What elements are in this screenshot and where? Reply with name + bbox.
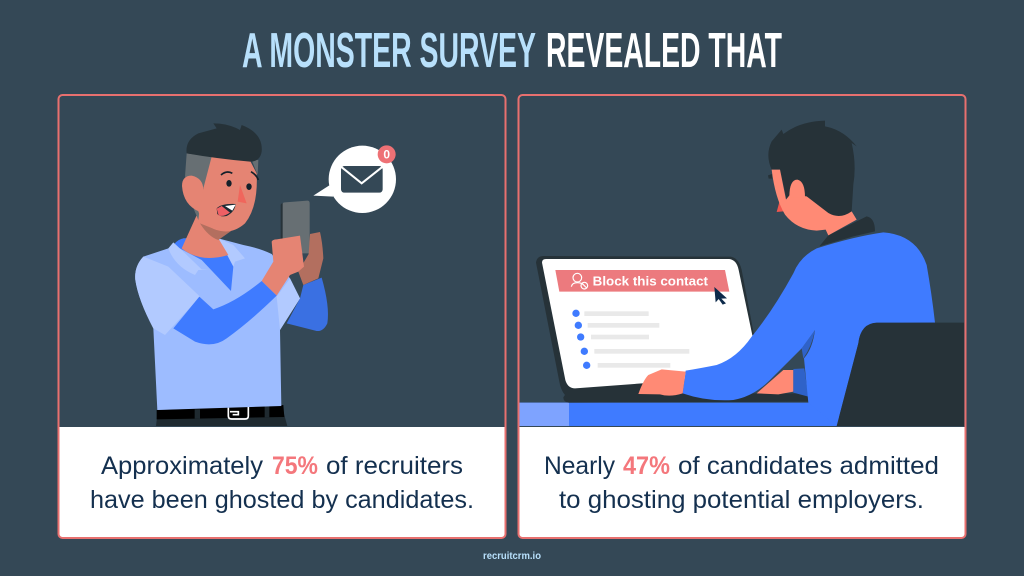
block contact banner: Block this contact [593, 274, 709, 289]
torso and arm [683, 232, 935, 426]
far hand [757, 370, 793, 394]
title: A MONSTER SURVEY [242, 24, 536, 78]
near hand [638, 369, 686, 396]
back arm sleeve [287, 278, 328, 331]
neck [182, 212, 228, 258]
head [198, 157, 257, 231]
ear [789, 180, 805, 197]
caption text right: 47% [623, 452, 670, 480]
caption text right [544, 452, 939, 514]
caption text left [90, 452, 474, 514]
front hand [262, 236, 304, 296]
ear [182, 176, 203, 212]
block contact banner [555, 270, 729, 292]
caption text right: of candidates admitted [678, 452, 939, 480]
back hand [298, 232, 323, 285]
footer url: recruitcrm.io [483, 551, 541, 562]
laptop base [563, 393, 808, 403]
neck shadow [200, 223, 232, 240]
chair [837, 323, 964, 426]
shirt [135, 238, 300, 410]
caption box right [518, 427, 966, 538]
caption text left: 75% [272, 452, 318, 480]
desk [519, 403, 839, 426]
speech bubble with envelope: 0 [383, 148, 390, 162]
trousers and belt [156, 405, 287, 426]
panel: candidates ghosting [518, 95, 966, 538]
collar [819, 216, 875, 246]
illustration: man reading phone [135, 123, 396, 426]
caption text right: Nearly [544, 452, 615, 480]
contact list [572, 310, 689, 369]
face [217, 172, 258, 216]
speech bubble with envelope [313, 145, 396, 213]
sleeve shadow [802, 330, 815, 358]
hair [768, 121, 857, 216]
shirt sleeves light [135, 257, 300, 335]
caption text right: to ghosting potential employers. [559, 486, 924, 514]
undershirt [173, 238, 233, 291]
hair top [186, 123, 262, 162]
laptop screen [542, 259, 753, 388]
far sleeve cuff [793, 368, 808, 397]
glasses arm [768, 174, 772, 179]
neck and face [772, 170, 857, 235]
caption text left: of recruiters [326, 452, 463, 480]
laptop frame [536, 256, 755, 397]
caption text left: have been ghosted by candidates. [90, 486, 474, 514]
panel: recruiters ghosted [58, 95, 506, 538]
title: REVEALED THAT [546, 24, 782, 78]
nose tip [777, 200, 783, 212]
caption text left: Approximately [101, 452, 264, 480]
cursor [714, 287, 727, 305]
gray hair [185, 153, 258, 220]
front arm sleeve [173, 281, 277, 344]
collar [168, 238, 245, 275]
caption box left [58, 427, 506, 538]
illustration: man at laptop [519, 121, 964, 426]
phone [281, 201, 310, 253]
